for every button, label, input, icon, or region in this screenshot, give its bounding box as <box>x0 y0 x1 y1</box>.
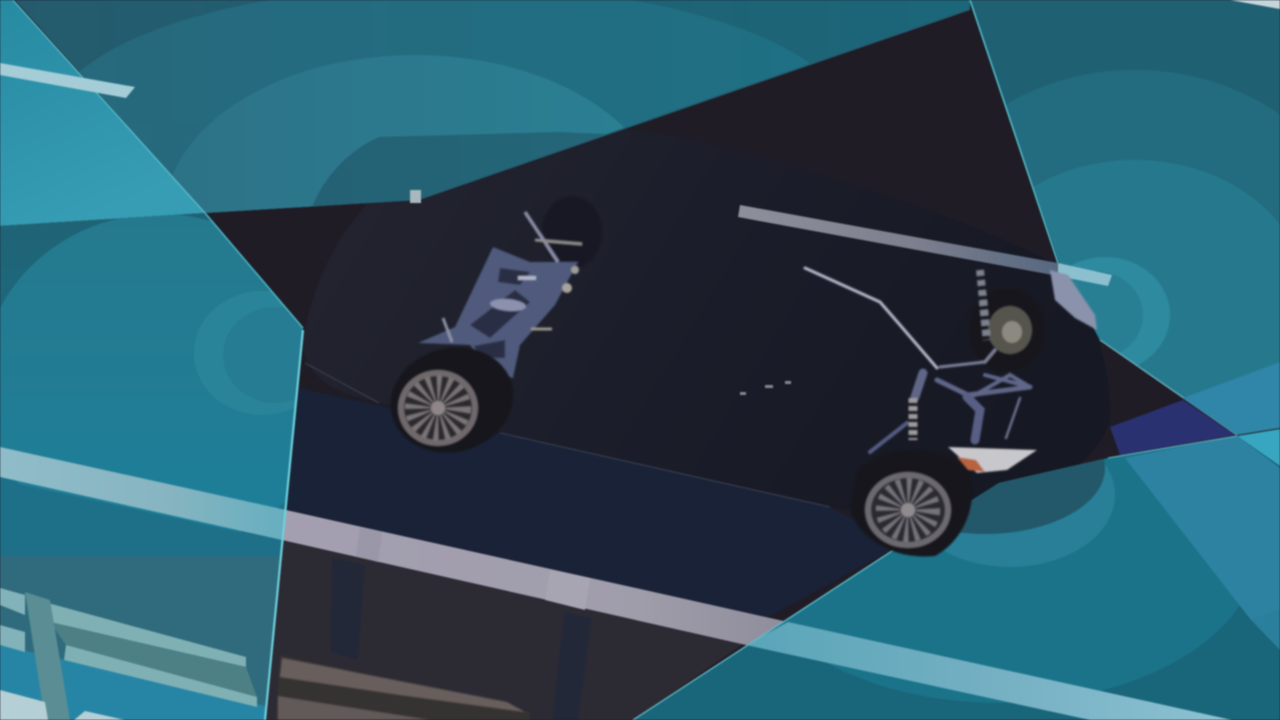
road marking: windscreen stripe <box>738 205 1112 286</box>
rail beams seen through zone <box>48 603 246 667</box>
road marking: top right corner <box>1230 0 1280 9</box>
road marking: long white stripe <box>282 510 788 645</box>
blue overlap triangle <box>1110 400 1235 455</box>
sensor zone: top <box>15 0 971 214</box>
sensor zone: left <box>0 213 338 720</box>
front wheel <box>850 450 972 557</box>
sensor zone: upper left <box>0 0 205 226</box>
road marking: upper left dash <box>0 63 135 98</box>
front bumper bracket <box>1050 270 1097 330</box>
guard rail <box>276 655 530 720</box>
sensor zone: far right blue <box>1183 362 1280 435</box>
rear wheel <box>379 334 525 466</box>
windscreen shading <box>312 132 606 207</box>
front suspension <box>805 268 1045 452</box>
sensor zone: bottom right <box>632 428 1280 720</box>
sensor zone: right <box>968 0 1280 436</box>
car body silhouette <box>303 129 1110 530</box>
small marks on car floor <box>740 381 791 395</box>
car floor outline <box>305 363 830 507</box>
rear suspension <box>418 196 602 378</box>
headlight <box>948 447 1037 473</box>
road marking: small square <box>410 190 421 203</box>
